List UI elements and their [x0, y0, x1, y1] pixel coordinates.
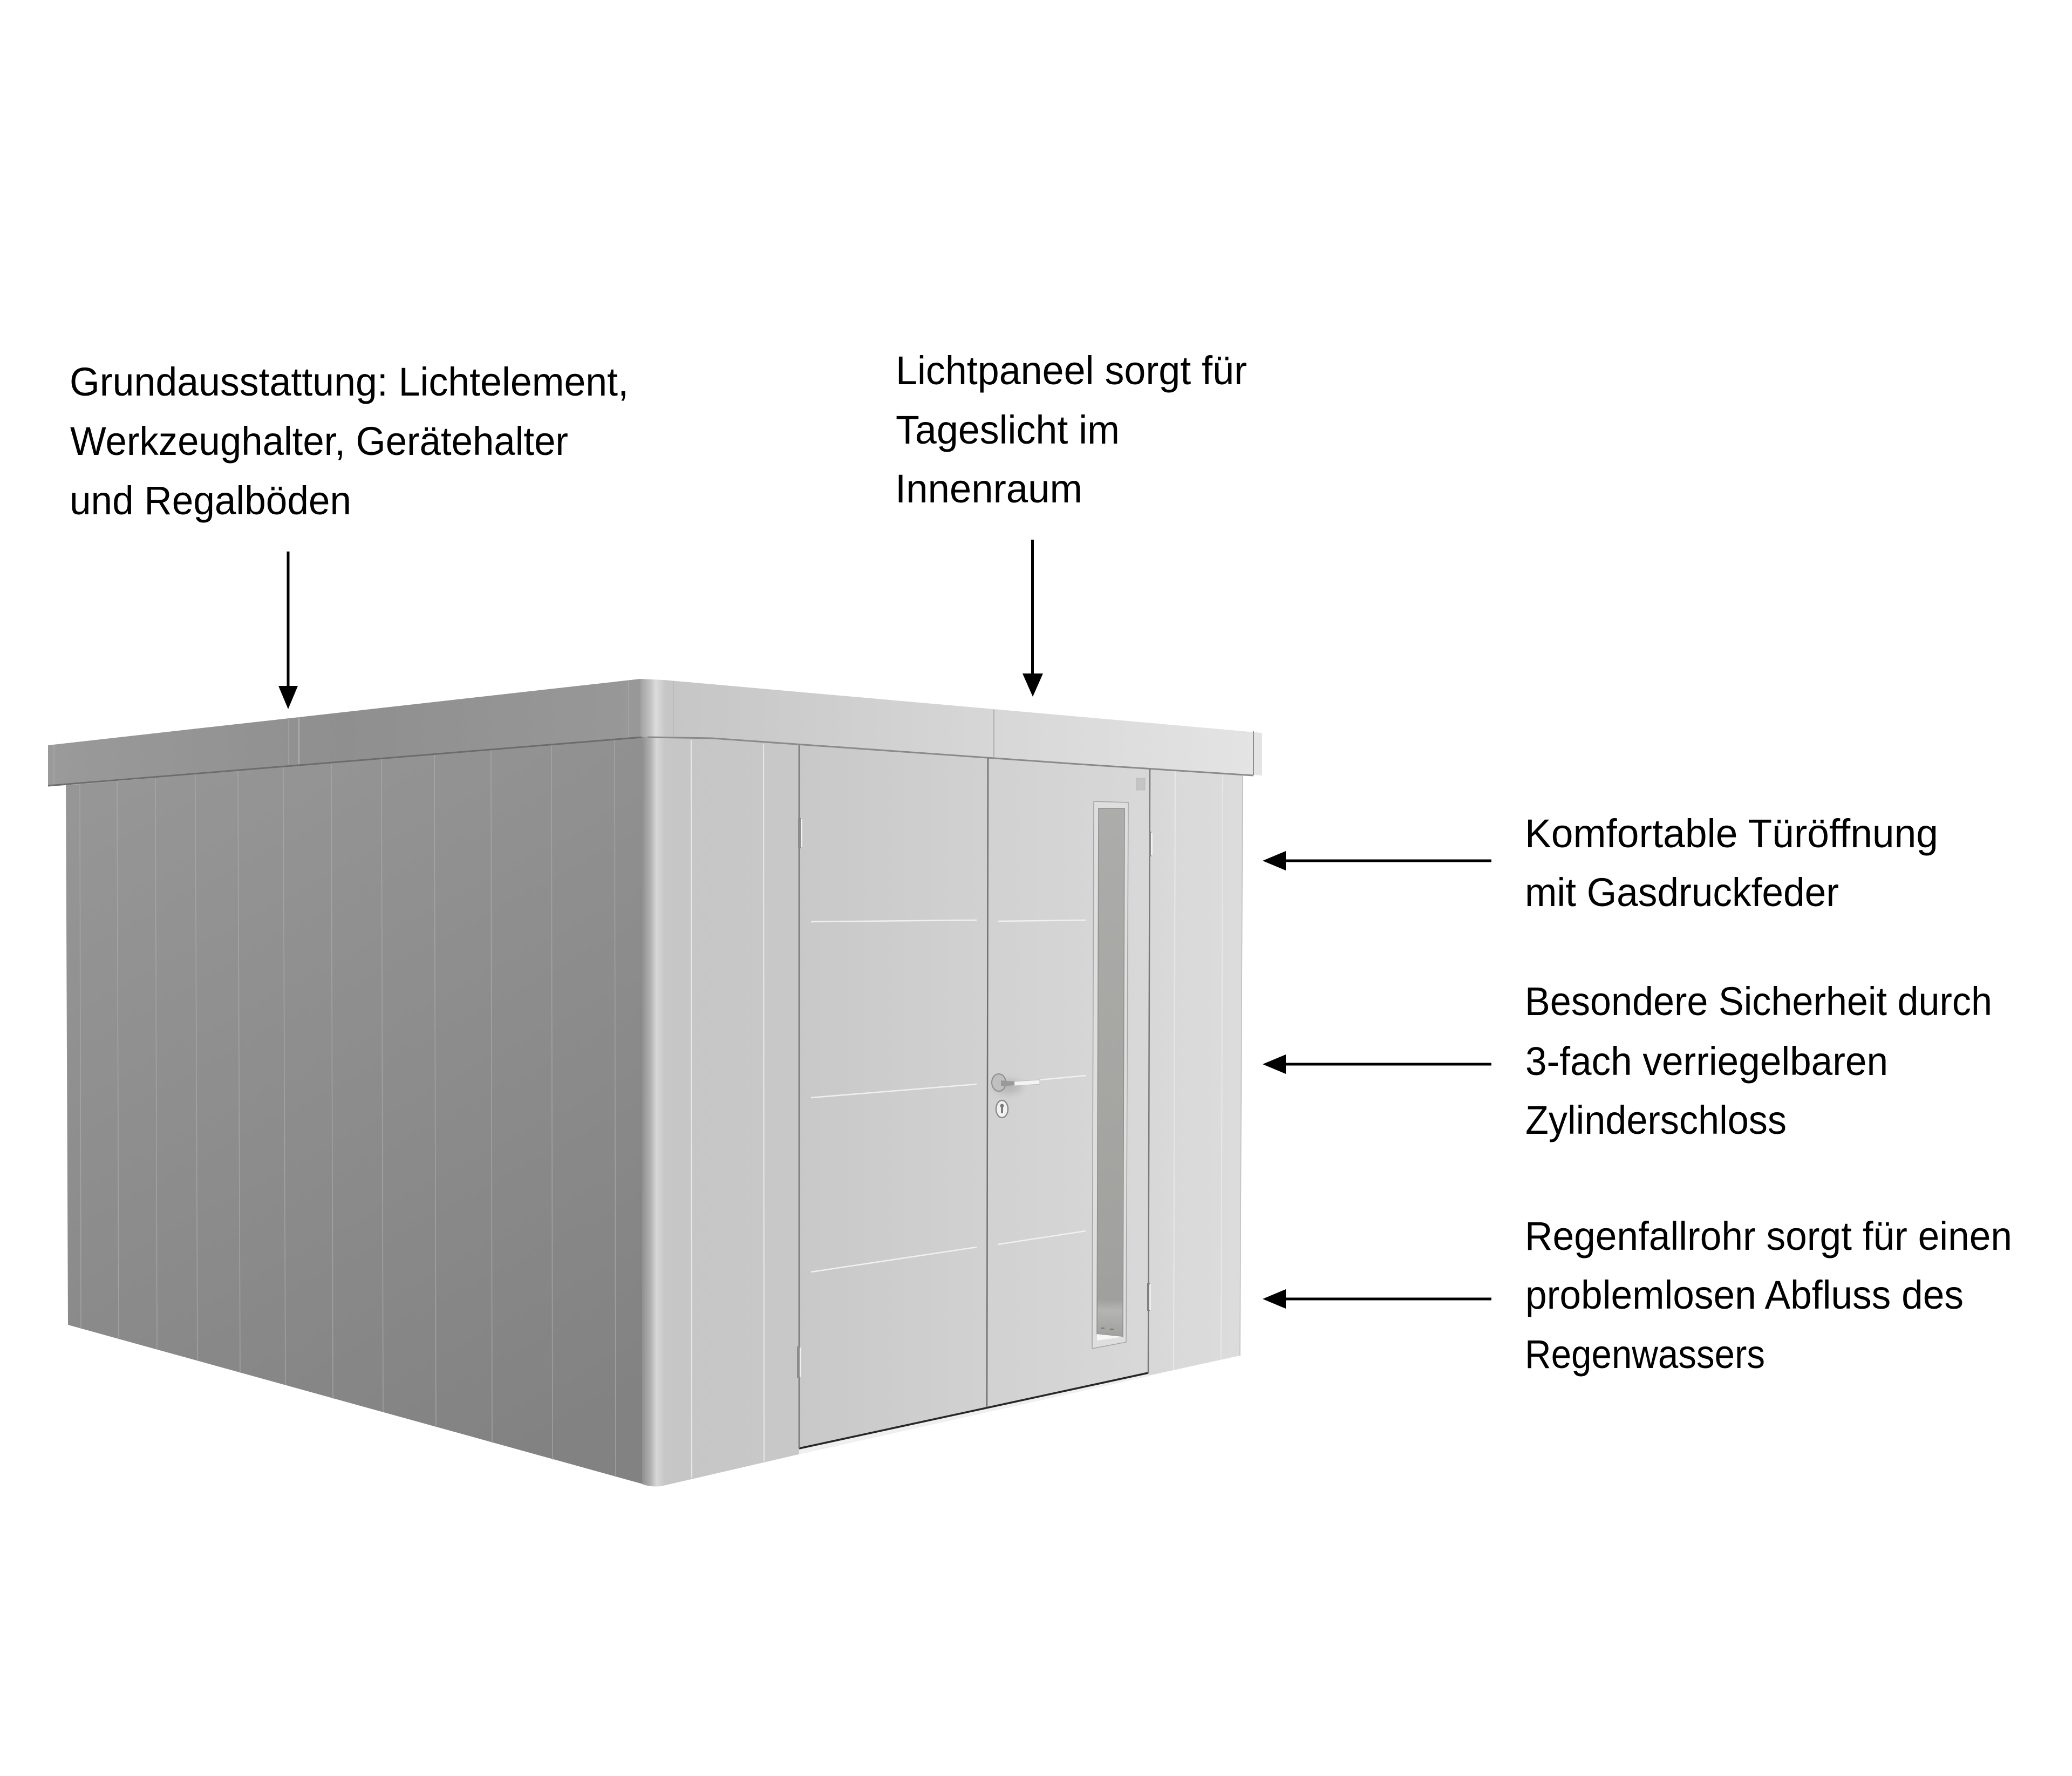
text: Lichtpaneel: [895, 348, 1247, 511]
front roof fascia: [640, 679, 1262, 775]
text: Grundausstattung: Werkzeughalter, Gerätehalter: [70, 419, 568, 464]
text: Komfortable Türöffnung: mit Gasdruckfeder: [1525, 870, 1839, 915]
text: Besondere Sicherheit: Zylinderschloss: [1525, 1098, 1787, 1142]
door: ventilation label: [1136, 778, 1145, 790]
arrow: downpipe: [1263, 1289, 1491, 1309]
left roof fascia: [48, 679, 642, 786]
text: Besondere Sicherheit: [1525, 979, 1992, 1142]
text: Lichtpaneel: Innenraum: [895, 466, 1082, 511]
arrow: door opening: [1263, 851, 1491, 870]
arrow: to roof right: [1023, 540, 1043, 697]
text: Regenfallrohr: problemlosen Abfluss des: [1525, 1273, 1964, 1317]
arrow: lock: [1263, 1054, 1491, 1074]
front wall with rounded corner: [642, 733, 1243, 1486]
left side wall: [66, 737, 645, 1485]
text: Grundausstattung: und Regalböden: [70, 478, 351, 523]
text: Regenfallrohr: Regenfallrohr sorgt für einen: [1525, 1214, 2012, 1258]
text: Lichtpaneel: Tageslicht im: [896, 407, 1120, 452]
door: hinges: [797, 818, 1153, 1378]
text: Besondere Sicherheit: 3-fach verriegelbaren: [1525, 1039, 1888, 1084]
shed illustration: [48, 679, 1262, 1486]
arrow: to roof left: [278, 552, 298, 709]
door: window: [1092, 801, 1128, 1349]
text: Regenfallrohr: [1525, 1214, 2012, 1377]
text: Regenfallrohr: Regenwassers: [1525, 1332, 1765, 1377]
text: Komfortable Türöffnung: [1525, 811, 1938, 915]
text: Komfortable Türöffnung: Komfortable Türöffnung: [1525, 811, 1938, 856]
door: threshold and frame lines: [799, 745, 1150, 1454]
text: Lichtpaneel: Lichtpaneel sorgt für: [896, 348, 1247, 393]
text: Besondere Sicherheit: Besondere Sicherheit durch: [1525, 979, 1992, 1024]
door: handle and lock: [992, 1074, 1040, 1118]
text: Grundausstattung: Grundausstattung: Lichtelement,: [70, 359, 629, 404]
door: decorative grooves: [811, 920, 1086, 1272]
text: Grundausstattung: [70, 359, 629, 523]
